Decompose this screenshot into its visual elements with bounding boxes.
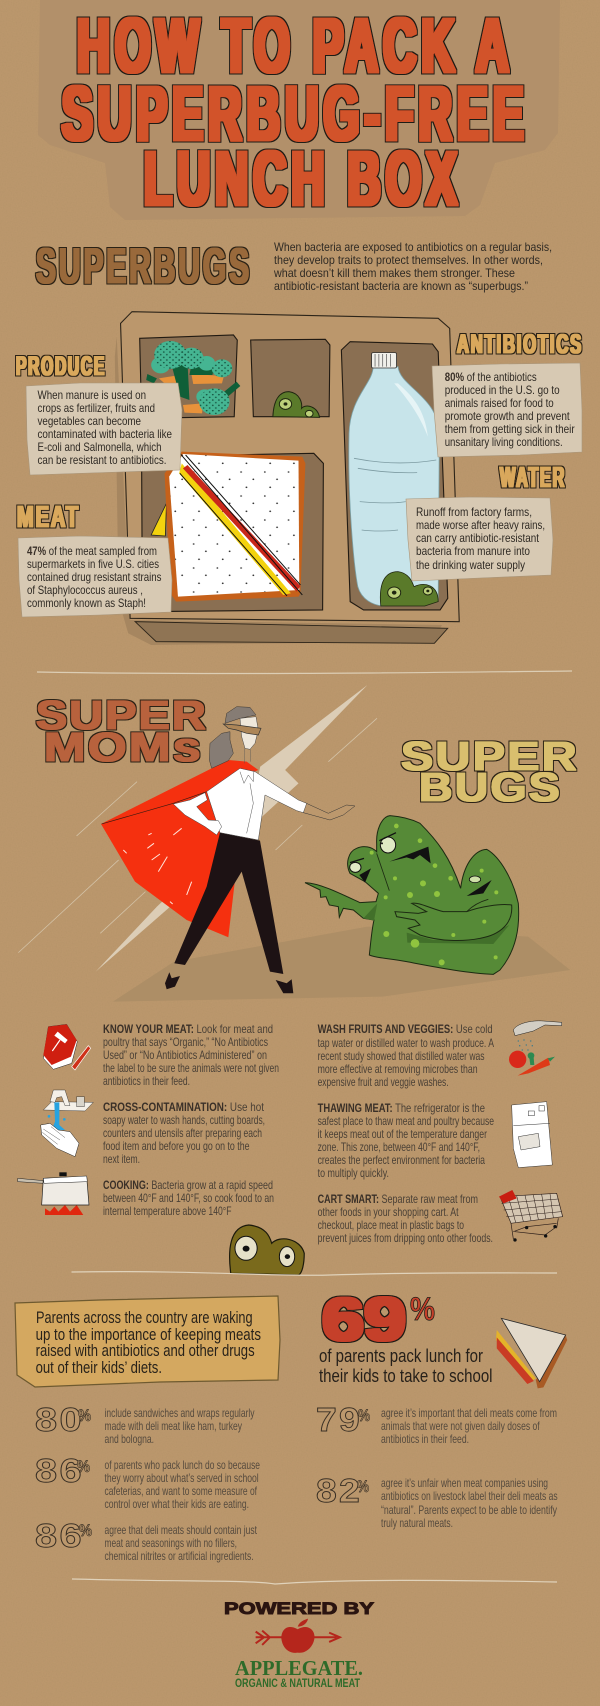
antibiotics text: 80% of the antibiotics: [445, 370, 537, 384]
stat: 86 percent school: control over what their kids are eating.: [104, 1497, 249, 1511]
stat: 79 percent: 79: [316, 1401, 362, 1438]
tip: cart smart: [318, 1192, 493, 1245]
tip: cross-contamination: food item and before you go on to the: [103, 1139, 250, 1153]
lightning bolt: [96, 685, 367, 972]
intro text: what doesn’t kill them makes them stronger. These: [273, 266, 515, 280]
heading: super bugs: BUGS: [419, 764, 562, 810]
scene backdrop: floor, bolt, speed lines: [18, 685, 570, 1002]
stat: 69 percent: [319, 1286, 492, 1386]
stat: 79 percent: %: [358, 1406, 370, 1425]
tip: thawing meat: to multiply quickly.: [318, 1166, 389, 1180]
heading: super bugs: SUPER: [401, 733, 579, 779]
icon: shower and produce: [509, 1021, 562, 1076]
icon: bug peeking: [273, 392, 320, 417]
stat: 86 percent ingredients: meat and seasonings with no fillers,: [104, 1536, 237, 1550]
icon: shopping cart: [499, 1190, 563, 1242]
tip: wash fruits and veggies: recent study showed that distilled water was: [318, 1049, 485, 1063]
produce text: [38, 388, 172, 467]
icon: faucet and hands: [41, 1090, 93, 1157]
callout text: Parents across the country are waking: [36, 1308, 253, 1327]
stat: 82 percent: 82: [316, 1472, 362, 1509]
stat: 80 percent: %: [78, 1406, 91, 1425]
stat: 80 percent: include sandwiches and wraps regularly: [104, 1406, 254, 1420]
tip: know your meat: antibiotics in their feed.: [103, 1074, 190, 1088]
intro text: When bacteria are exposed to antibiotics on a regular basis,: [274, 240, 552, 254]
stat: 86 percent school: of parents who pack lunch do so because: [104, 1458, 260, 1472]
tip: wash fruits and veggies: tap water or distilled water to wash produce. A: [318, 1036, 494, 1050]
powered by heading: POWERED BY: [224, 1599, 375, 1618]
tip: thawing meat: zone. This zone, between 40°F and 140°F,: [318, 1140, 480, 1154]
icon: sandwich wedge: [496, 1318, 567, 1388]
monster spots: [370, 824, 498, 965]
lunch box illustration: [115, 312, 459, 645]
tip: cross-contamination: [103, 1100, 265, 1166]
tip: cooking: COOKING: Bacteria grow at a rapid speed: [103, 1178, 273, 1192]
antibiotics text: animals raised for food to: [445, 396, 554, 410]
meat text: [27, 544, 162, 610]
compartment top left: [140, 335, 237, 418]
water text: [416, 505, 545, 572]
left tip icons: [18, 1024, 93, 1215]
callout: meat: [18, 536, 172, 617]
callout: parents: [15, 1296, 280, 1387]
icon: water bottle: [349, 353, 439, 606]
compartment sandwich: [142, 453, 323, 612]
icon: fridge: [512, 1102, 552, 1168]
shirt: [207, 768, 307, 840]
cape: [101, 760, 258, 937]
tip: cart smart: other foods in your shopping cart. At: [318, 1205, 459, 1219]
stat: 86 percent school: cafeterias, and want to some measure of: [104, 1484, 257, 1498]
tip: cross-contamination: counters and utensils after preparing each: [103, 1126, 262, 1140]
tip: thawing meat: it keeps meat out of the temperature danger: [318, 1127, 487, 1141]
stat: 80 percent: and bologna.: [104, 1432, 154, 1446]
lunch box shell: [115, 312, 459, 645]
number 69: 69: [322, 1286, 406, 1353]
tip: cooking: between 40°F and 140°F, so cook food to an: [103, 1191, 274, 1205]
logo: applegate wordmark: APPLEGATE.: [235, 1656, 363, 1680]
icon: broccoli and carrots: [146, 341, 240, 415]
water text: Runoff from factory farms,: [416, 505, 532, 519]
meat text: supermarkets in five U.S. cities: [27, 557, 159, 571]
logo tagline: ORGANIC & NATURAL MEAT: [235, 1676, 361, 1690]
tip: cross-contamination: soapy water to wash hands, cutting boards,: [103, 1113, 265, 1127]
stat: 79 percent: [316, 1401, 557, 1446]
antibiotics text: [445, 370, 575, 449]
callout text: raised with antibiotics and other drugs: [36, 1341, 255, 1360]
monster faces: [350, 833, 492, 896]
tip: cart smart: checkout, place meat in plastic bags to: [318, 1218, 464, 1232]
hair: [209, 707, 256, 768]
callout text: [36, 1308, 261, 1377]
heading: superbugs: SUPERBUGS: [36, 238, 252, 294]
stat: 80 percent: [35, 1401, 254, 1446]
water text: made worse after heavy rains,: [416, 518, 545, 532]
callout text: up to the importance of keeping meats: [36, 1325, 261, 1344]
tip: know your meat: [103, 1022, 279, 1088]
produce text: vegetables can become: [38, 414, 141, 428]
title: [62, 3, 529, 222]
water text: the drinking water supply: [416, 558, 525, 572]
produce text: E-coli and Salmonella, which: [38, 440, 162, 454]
super mom: [101, 707, 355, 993]
produce text: contaminated with bacteria like: [38, 427, 172, 441]
icon: steak: [43, 1024, 91, 1070]
panel: produce: [16, 351, 182, 475]
tip: know your meat: KNOW YOUR MEAT: Look for meat and: [103, 1022, 273, 1036]
tip: wash fruits and veggies: more effective at removing microbes than: [318, 1062, 478, 1076]
callout: produce: [26, 383, 182, 475]
panel: water: [406, 462, 566, 581]
heading: meat: MEAT: [17, 499, 80, 534]
tip: thawing meat: THAWING MEAT: The refrigerator is the: [318, 1101, 485, 1115]
pants: [174, 833, 283, 974]
face: [240, 717, 258, 749]
callout: antibiotics: [432, 363, 582, 457]
tip: cross-contamination: CROSS-CONTAMINATION: Use hot: [103, 1100, 265, 1114]
stat: 82 percent: [316, 1472, 558, 1530]
heading: super bugs: [401, 733, 579, 810]
shoes: [165, 972, 293, 993]
tip: thawing meat: safest place to thaw meat and poultry because: [318, 1114, 494, 1128]
floor shadow: [113, 927, 570, 1002]
stat caption: their kids to take to school: [319, 1366, 492, 1386]
water text: bacteria from manure into: [416, 544, 530, 558]
stat: 86 percent ingredients: chemical nitrites or artificial ingredients.: [104, 1549, 254, 1563]
superbug monster: [305, 816, 519, 974]
speed lines: [18, 718, 377, 953]
heading: super moms: SUPER: [36, 692, 208, 738]
stat: 82 percent: %: [357, 1477, 369, 1496]
tip: wash fruits and veggies: [318, 1022, 494, 1089]
stat: 86 percent school: [35, 1452, 260, 1511]
percent sign: %: [410, 1291, 435, 1327]
tip: wash fruits and veggies: WASH FRUITS AND VEGGIES: Use cold: [318, 1022, 493, 1036]
produce text: can be resistant to antibiotics.: [38, 453, 166, 467]
stat caption: of parents pack lunch for: [319, 1346, 483, 1366]
compartment top middle: [251, 339, 330, 417]
meat text: commonly known as Staph!: [27, 596, 146, 610]
heading: produce: PRODUCE: [16, 351, 106, 381]
icon: pot on flame: [18, 1172, 89, 1215]
icon: brown bug peeking: [230, 1225, 304, 1275]
stat caption: [319, 1346, 492, 1386]
water text: can carry antibiotic-resistant: [416, 531, 540, 545]
panel: meat: [17, 499, 172, 617]
icon: bug in bottle: [380, 572, 438, 606]
heading: super moms: MOMs: [44, 724, 203, 770]
antibiotics text: promote growth and prevent: [445, 409, 570, 423]
stat: 79 percent: animals that were not given daily doses of: [381, 1419, 540, 1433]
callout text: out of their kids’ diets.: [36, 1358, 162, 1377]
stat: 86 percent ingredients: [35, 1517, 257, 1563]
stat: 86 percent school: 86: [35, 1452, 84, 1489]
tip: wash fruits and veggies: expensive fruit and veggie washes.: [318, 1075, 449, 1089]
tip: cross-contamination: next item.: [103, 1152, 140, 1166]
antibiotics text: them from getting sick in their: [445, 422, 575, 436]
stat: 80 percent: made with deli meat like ham, turkey: [104, 1419, 242, 1433]
produce text: crops as fertilizer, fruits and: [38, 401, 155, 415]
stat: 79 percent: antibiotics in their feed.: [381, 1432, 469, 1446]
intro text: they develop traits to protect themselves. In other words,: [274, 253, 543, 267]
stat: 86 percent ingredients: agree that deli meats should contain just: [104, 1523, 257, 1537]
logo: applegate apple and arrow: [256, 1619, 340, 1653]
compartment right: [341, 342, 448, 610]
tip: know your meat: Used” or “No Antibiotics Administered” on: [103, 1048, 267, 1062]
meat text: contained drug resistant strains: [27, 570, 162, 584]
tip: know your meat: the label to be sure the animals were not given: [103, 1061, 279, 1075]
monster arm: [395, 903, 512, 941]
right tip icons: [499, 1021, 563, 1242]
stat: 86 percent school: they worry about what’s served in school: [104, 1471, 259, 1485]
stat: 80 percent: 80: [35, 1401, 84, 1438]
monster body: [305, 816, 519, 974]
tip: thawing meat: creates the perfect environment for bacteria: [318, 1153, 485, 1167]
stat: 86 percent school: %: [77, 1457, 90, 1476]
produce text: When manure is used on: [38, 388, 146, 402]
callout: water: [406, 497, 553, 581]
tip: know your meat: poultry that says “Organic,” “No Antibiotics: [103, 1035, 268, 1049]
meat text: 47% of the meat sampled from: [27, 544, 157, 558]
stat: 86 percent ingredients: %: [79, 1521, 92, 1540]
meat text: of Staphylococcus aureus ,: [27, 583, 143, 597]
stat: 82 percent: truly natural meats.: [381, 1516, 453, 1530]
tip: cart smart: prevent juices from dripping onto other foods.: [318, 1231, 493, 1245]
tip: cooking: [103, 1178, 274, 1218]
antibiotics text: unsanitary living conditions.: [445, 435, 563, 449]
stat: 86 percent ingredients: 86: [35, 1517, 84, 1554]
mask: [223, 724, 261, 735]
icon: sandwich: [151, 452, 305, 602]
antibiotics text: produced in the U.S. go to: [445, 383, 560, 397]
panel: antibiotics: [432, 329, 583, 457]
tip: cart smart: CART SMART: Separate raw meat from: [318, 1192, 478, 1206]
forearm: [303, 803, 355, 820]
intro text: [273, 240, 552, 293]
tip: thawing meat: [318, 1101, 494, 1180]
intro text: antibiotic-resistant bacteria are known as “superbugs.”: [274, 279, 528, 293]
heading: super moms: [36, 692, 208, 770]
tip: cooking: internal temperature above 140°F: [103, 1204, 232, 1218]
title backdrop: [38, 0, 560, 220]
